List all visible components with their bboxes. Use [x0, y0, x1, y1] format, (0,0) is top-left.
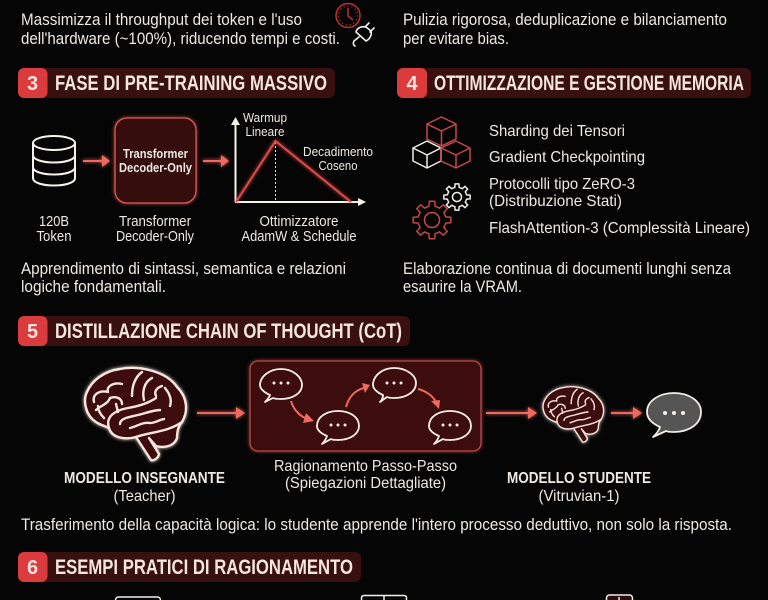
arrow: step 2 to 3 [346, 383, 370, 407]
icon: example 1 top [116, 597, 160, 600]
text: memory description: esaurire la VRAM. [403, 277, 522, 296]
text: memory description: Elaborazione continua di documenti lunghi senza [403, 259, 731, 278]
text: pre-training description [21, 259, 346, 296]
icon: student brain [543, 387, 604, 442]
heading: section 6 [18, 552, 361, 582]
heading: section 6: 6 [27, 557, 38, 579]
heading: section 5: DISTILLAZIONE CHAIN OF THOUGHT (CoT) [55, 320, 402, 343]
text: throughput description [21, 10, 340, 48]
icon: database [33, 136, 75, 186]
label: reasoning: (Spiegazioni Dettagliate) [285, 475, 446, 492]
icon: speech bubble 4 [429, 411, 471, 444]
heading: section 6: ESEMPI PRATICI DI RAGIONAMENTO [55, 556, 353, 579]
text: pre-training description: Apprendimento di sintassi, semantica e relazioni [21, 259, 346, 278]
label: optimizer: Ottimizzatore [260, 213, 338, 230]
label: tokens: Token [36, 228, 72, 245]
heading: section 3: 3 [27, 73, 38, 95]
arrow: data to transformer [83, 155, 110, 167]
icon: red cube top [427, 117, 456, 146]
icon: clock [336, 4, 360, 28]
heading: section 4 [397, 68, 751, 98]
icon: example 3 top [606, 595, 632, 600]
label: student: MODELLO STUDENTE [507, 470, 651, 487]
list: memory techniques: Protocolli tipo ZeRO-3 [489, 176, 635, 193]
heading: section 3 [18, 68, 335, 98]
icon: speech bubble 3 [373, 368, 416, 402]
label: tokens: 120B [39, 213, 69, 230]
arrow: step 3 to 4 [418, 389, 440, 409]
panel: pre-training diagram [21, 110, 373, 296]
text: throughput description: dell'hardware (~100%), riducendo tempi e costi. [21, 29, 340, 48]
label: reasoning: Ragionamento Passo-Passo [274, 458, 457, 475]
label: reasoning [274, 458, 457, 492]
text: throughput description: Massimizza il throughput dei token e l'uso [21, 10, 302, 29]
chart: learning rate schedule: Coseno [318, 158, 358, 173]
panel: distillation flow [21, 361, 732, 534]
icon: white cube [413, 141, 441, 168]
icon: plug [353, 23, 374, 46]
list: memory techniques: Sharding dei Tensori [489, 123, 625, 140]
label: teacher [64, 470, 225, 505]
label: transformer [116, 213, 194, 245]
label: student: (Vitruvian-1) [538, 488, 620, 505]
chart: learning rate schedule: Decadimento [303, 144, 373, 159]
label: transformer: Transformer [119, 213, 191, 230]
list: memory techniques: (Distribuzione Stati) [489, 193, 622, 210]
icon: red gear [413, 201, 451, 239]
panel: memory optimization [403, 117, 750, 296]
list: memory techniques: Gradient Checkpointing [489, 149, 645, 166]
heading: section 3: FASE DI PRE-TRAINING MASSIVO [55, 72, 327, 95]
panel: throughput text [21, 4, 374, 48]
label: teacher: (Teacher) [114, 488, 176, 505]
heading: section 5: 5 [27, 321, 38, 343]
icon: example 2 top [362, 596, 406, 600]
icon: red cube right [441, 141, 470, 168]
list: memory techniques: FlashAttention-3 (Complessità Lineare) [489, 220, 750, 237]
icon: speech bubble 1 [260, 369, 302, 402]
heading: section 5 [18, 316, 410, 346]
arrow: reasoning to student [486, 407, 537, 419]
label: optimizer: AdamW & Schedule [242, 228, 356, 245]
label: tokens [36, 213, 72, 245]
box: transformer: Transformer [123, 146, 188, 161]
text: pre-training description: logiche fondamentali. [21, 277, 166, 296]
panel: data cleaning text: Pulizia rigorosa, deduplicazione e bilanciamento [403, 10, 727, 29]
panel: data cleaning text [403, 10, 727, 48]
label: optimizer [242, 213, 356, 245]
list: memory techniques [489, 123, 750, 237]
chart: learning rate schedule: Warmup [243, 110, 287, 125]
arrow: teacher to reasoning [197, 407, 245, 419]
label: teacher: MODELLO INSEGNANTE [64, 470, 225, 487]
label: student [507, 470, 651, 505]
chart: learning rate schedule [231, 110, 373, 206]
icon: white gear [444, 184, 470, 210]
icon: teacher brain [85, 368, 186, 460]
icon: speech bubble 2 [317, 411, 359, 444]
box: transformer: Decoder-Only [119, 160, 193, 175]
box: transformer [115, 118, 196, 203]
arrow: student to answer [611, 407, 642, 419]
arrow: transformer to optimizer [203, 155, 229, 167]
arrow: step 1 to 2 [291, 401, 314, 423]
label: transformer: Decoder-Only [116, 228, 194, 245]
panel: data cleaning text: per evitare bias. [403, 29, 509, 48]
chart: learning rate schedule: Lineare [246, 124, 284, 139]
box: reasoning steps [250, 361, 481, 451]
heading: section 4: 4 [406, 73, 418, 95]
icon: answer bubble [647, 393, 701, 437]
text: memory description [403, 259, 731, 296]
